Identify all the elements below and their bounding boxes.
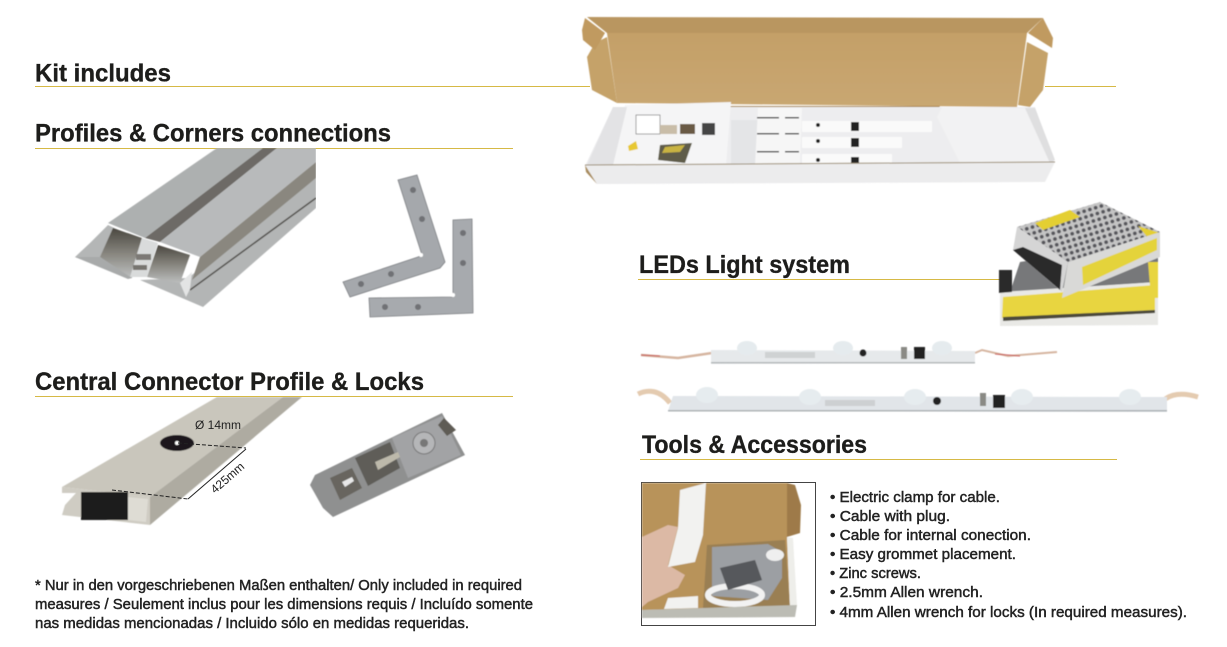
list: accessories: • Zinc screws. <box>830 566 921 582</box>
dimension: hole diameter and spacing: 425mm <box>208 459 247 496</box>
footnote: nas medidas mencionadas / Incluido sólo en medidas requeridas. <box>35 616 469 632</box>
list: accessories: • Easy grommet placement. <box>830 547 1016 563</box>
LED strip: long <box>638 387 1198 412</box>
photo: accessories box <box>642 482 816 626</box>
photo: corner connectors <box>343 175 473 317</box>
heading: LEDs Light system: LEDs Light system <box>639 251 850 279</box>
photo: lock mechanism <box>310 413 465 517</box>
list: accessories: • Cable for internal conection. <box>830 528 1031 544</box>
photo: central connector profile with dimensions <box>62 397 302 525</box>
photo: power supplies <box>999 202 1160 326</box>
heading: Profiles & Corners connections: Profiles & Corners connections <box>35 120 391 148</box>
list: accessories: • Cable with plug. <box>830 509 950 525</box>
footnote: * Nur in den vorgeschriebenen Maßen enthalten/ Only included in required <box>35 578 522 594</box>
LED strip: short <box>641 341 1057 364</box>
heading: Central Connector Profile & Locks: Central Connector Profile & Locks <box>35 368 424 396</box>
photo: aluminium profile <box>75 148 316 307</box>
list: accessories <box>830 490 1187 621</box>
corner piece 1 <box>343 175 445 297</box>
footnote: measures / Seulement inclus pour les dimensions requis / Incluído somente <box>35 597 533 613</box>
footnote <box>35 578 533 632</box>
photo: open kit cardboard box <box>582 17 1055 184</box>
corner piece 2 <box>369 219 473 317</box>
heading: Kit includes: Kit includes <box>35 60 171 88</box>
list: accessories: • 2.5mm Allen wrench. <box>830 585 983 601</box>
dimension: hole diameter and spacing <box>112 418 247 499</box>
list: accessories: • 4mm Allen wrench for locks (In required measures). <box>830 605 1187 621</box>
heading: Tools & Accessories: Tools & Accessories <box>642 431 867 459</box>
list: accessories: • Electric clamp for cable. <box>830 490 1000 506</box>
dimension: hole diameter and spacing: Ø 14mm <box>195 418 241 432</box>
